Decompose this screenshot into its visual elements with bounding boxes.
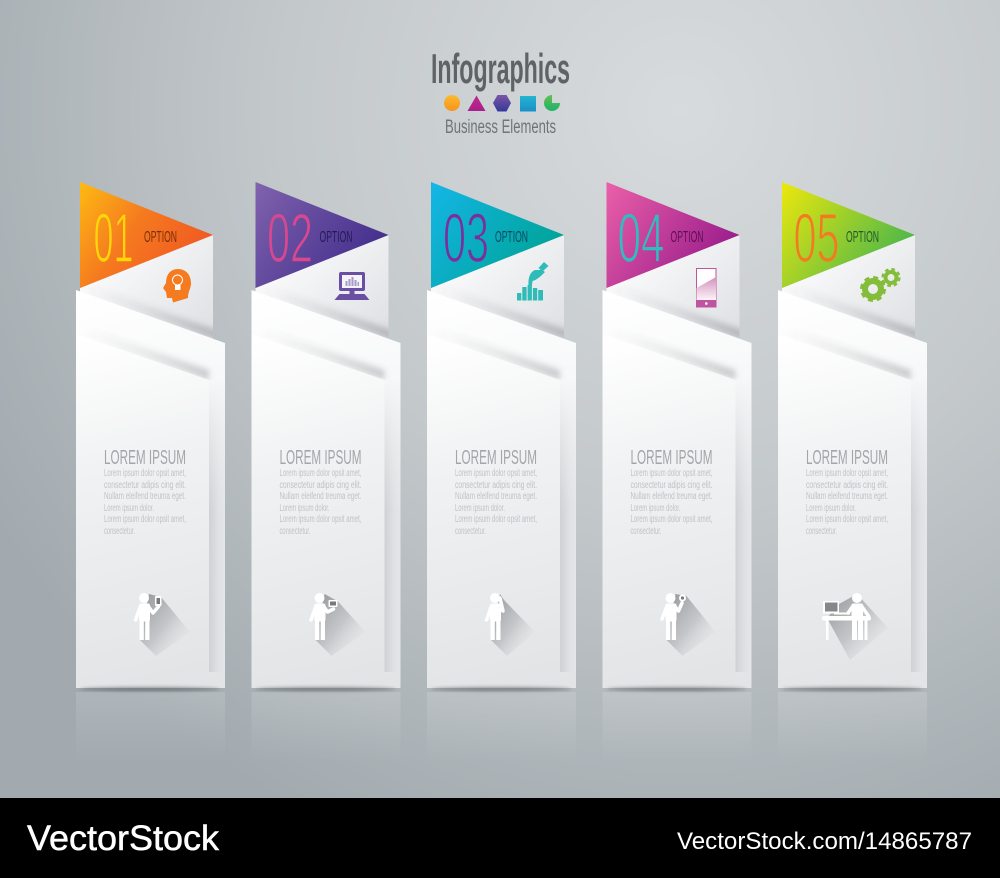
shape row xyxy=(444,95,560,112)
label OPTION: OPTION xyxy=(670,229,704,246)
folded back sheet xyxy=(782,235,915,342)
icon: person with laptop xyxy=(311,593,338,640)
heading: Infographics: Infographics xyxy=(431,45,570,92)
label OPTION: OPTION xyxy=(144,229,177,246)
fold sheet xyxy=(252,290,400,688)
text block: consectetur adipis cing elit. xyxy=(280,480,362,491)
text block: Lorem ipsum dolor opsit amet, xyxy=(455,468,537,479)
icon: person with tablet xyxy=(136,593,162,640)
panel: option 02 xyxy=(252,182,400,762)
text block: consectetur. xyxy=(104,526,135,537)
fold sheet xyxy=(778,290,927,688)
icon: gears xyxy=(862,269,900,300)
number 04: 04 xyxy=(618,199,664,277)
text block xyxy=(455,447,537,537)
text block: Lorem ipsum dolor. xyxy=(630,503,680,514)
text block: consectetur adipis cing elit. xyxy=(806,480,888,491)
footer band xyxy=(0,798,1000,878)
fold sheet xyxy=(427,290,576,688)
icon: person on phone xyxy=(486,593,503,640)
right strip xyxy=(911,380,927,672)
right strip xyxy=(736,380,752,672)
reflection xyxy=(778,692,927,762)
colored triangle header xyxy=(80,182,213,288)
text block: consectetur adipis cing elit. xyxy=(455,480,537,491)
long shadow xyxy=(140,594,190,656)
text block: LOREM IPSUM xyxy=(280,447,362,469)
text block: Lorem ipsum dolor opsit amet, xyxy=(455,514,537,525)
text block xyxy=(104,447,186,537)
colored triangle header xyxy=(256,182,388,288)
folded back sheet xyxy=(431,235,564,342)
panel: option 04 xyxy=(602,182,752,762)
text block: LOREM IPSUM xyxy=(104,447,186,469)
base shadow xyxy=(80,687,220,691)
title block xyxy=(431,45,570,138)
text block: Lorem ipsum dolor. xyxy=(806,503,856,514)
label OPTION: OPTION xyxy=(495,229,528,246)
text block: Lorem ipsum dolor opsit amet, xyxy=(280,514,362,525)
text block: consectetur adipis cing elit. xyxy=(104,480,186,491)
text block xyxy=(280,447,362,537)
icon: hand and bar chart xyxy=(517,262,548,300)
text block: consectetur. xyxy=(806,526,837,537)
text block: Lorem ipsum dolor. xyxy=(455,503,505,514)
right strip xyxy=(560,380,576,672)
text block: Lorem ipsum dolor. xyxy=(104,503,154,514)
number 01: 01 xyxy=(94,199,134,277)
folded back sheet xyxy=(606,235,740,342)
text block: consectetur. xyxy=(630,526,662,537)
base shadow xyxy=(431,687,571,691)
text block: LOREM IPSUM xyxy=(455,447,537,469)
number 05: 05 xyxy=(794,199,840,277)
panel: option 05 xyxy=(778,182,927,762)
text block: Nullam eleifend treuma eget. xyxy=(455,491,537,502)
reflection xyxy=(427,692,576,762)
icon: person at desk xyxy=(822,593,871,640)
image URL: VectorStock.com/14865787 xyxy=(677,828,972,855)
number 02: 02 xyxy=(267,199,313,277)
label OPTION: OPTION xyxy=(320,229,352,246)
text block xyxy=(630,447,712,537)
base shadow xyxy=(782,687,922,691)
text block: Lorem ipsum dolor. xyxy=(280,503,330,514)
text block: Nullam eleifend treuma eget. xyxy=(104,491,186,502)
reflection xyxy=(602,692,752,762)
text block: Lorem ipsum dolor opsit amet, xyxy=(104,514,186,525)
label OPTION: OPTION xyxy=(846,229,879,246)
number 03: 03 xyxy=(443,199,489,277)
text block xyxy=(806,447,888,537)
text block: LOREM IPSUM xyxy=(630,447,712,469)
text block: Nullam eleifend treuma eget. xyxy=(630,491,712,502)
reflection xyxy=(252,692,400,762)
icon: person with bulb xyxy=(662,593,686,640)
right strip xyxy=(209,380,225,672)
fold sheet xyxy=(602,290,752,688)
text block: Lorem ipsum dolor opsit amet, xyxy=(280,468,362,479)
folded back sheet xyxy=(80,235,213,342)
text block: Lorem ipsum dolor opsit amet, xyxy=(806,468,888,479)
brand wordmark: VectorStock xyxy=(27,819,220,858)
text block: LOREM IPSUM xyxy=(806,447,888,469)
base shadow xyxy=(606,687,746,691)
text block: Nullam eleifend treuma eget. xyxy=(806,491,888,502)
folded back sheet xyxy=(256,235,388,342)
text block: consectetur. xyxy=(280,526,310,537)
long shadow xyxy=(827,594,888,660)
colored triangle header xyxy=(606,182,740,288)
long shadow xyxy=(666,594,716,656)
icon: computer monitor xyxy=(334,272,370,300)
right strip xyxy=(384,380,400,672)
icon: smartphone xyxy=(696,268,716,307)
front sheet xyxy=(602,334,736,688)
panel: option 01 xyxy=(76,182,225,762)
text block: Lorem ipsum dolor opsit amet, xyxy=(104,468,186,479)
text block: Lorem ipsum dolor opsit amet, xyxy=(806,514,888,525)
icon: head with bulb xyxy=(163,269,191,302)
base shadow xyxy=(256,687,396,691)
fold sheet xyxy=(76,290,225,688)
text block: Nullam eleifend treuma eget. xyxy=(280,491,362,502)
reflection xyxy=(76,692,225,762)
panel: option 03 xyxy=(427,182,576,762)
front sheet xyxy=(778,334,911,688)
front sheet xyxy=(427,334,560,688)
long shadow xyxy=(316,594,366,656)
front sheet xyxy=(252,334,384,688)
text block: consectetur. xyxy=(455,526,486,537)
text block: Lorem ipsum dolor opsit amet, xyxy=(630,468,712,479)
long shadow xyxy=(491,594,535,656)
text block: consectetur adipis cing elit. xyxy=(630,480,712,491)
subheading: Business Elements: Business Elements xyxy=(445,117,556,138)
front sheet xyxy=(76,334,209,688)
colored triangle header xyxy=(431,182,564,288)
colored triangle header xyxy=(782,182,915,288)
text block: Lorem ipsum dolor opsit amet, xyxy=(630,514,712,525)
